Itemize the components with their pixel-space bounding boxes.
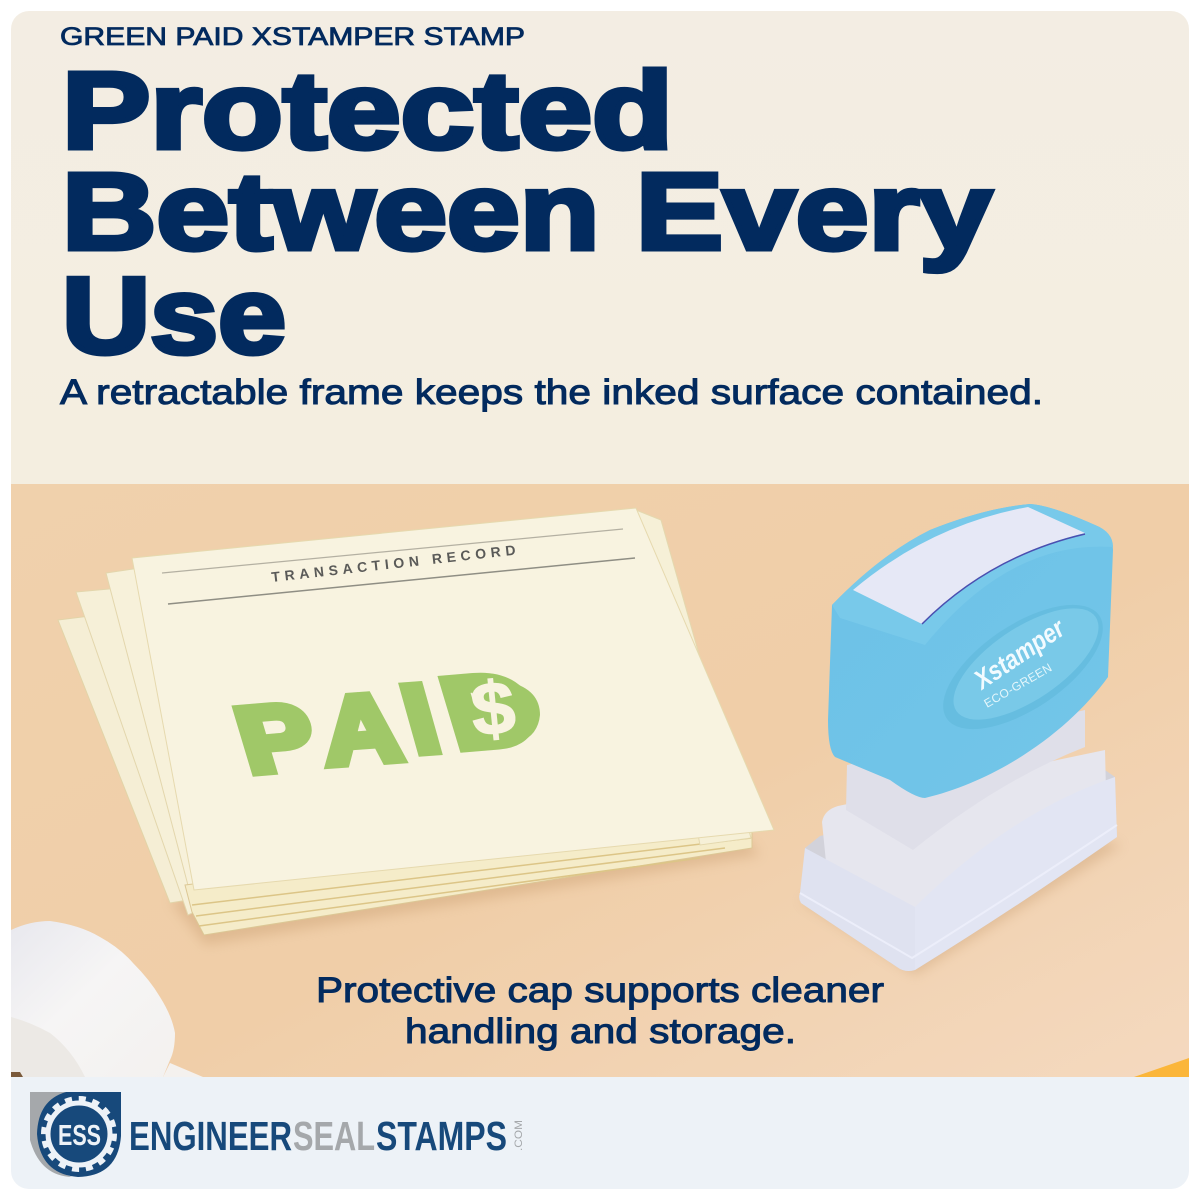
stamped impression: PAID: D <box>429 652 551 771</box>
top sheet <box>132 508 774 890</box>
illustration: blue Xstamper stamp <box>799 504 1123 975</box>
sheet bottom layers <box>184 832 752 935</box>
cap top rim <box>832 504 1113 645</box>
title <box>62 50 992 377</box>
title: Between Every <box>62 151 992 273</box>
caption: handling and storage. <box>405 1012 796 1051</box>
caption: Protective cap supports cleaner <box>316 971 884 1010</box>
panel: footer band <box>11 1077 1189 1189</box>
title: Protected <box>62 50 673 172</box>
gear emblem <box>48 1103 110 1165</box>
tray left wall <box>799 848 915 971</box>
ESS initials: ESS <box>58 1120 101 1152</box>
logo: Engineer Seal Stamps <box>30 1092 525 1177</box>
.com: .COM <box>513 1120 525 1151</box>
icon: paper tape roll <box>11 921 203 1077</box>
stamped impression: PAID: I <box>391 664 450 774</box>
stamped impression: PAID: P <box>224 683 328 793</box>
plunger block <box>822 750 1106 908</box>
neck <box>846 710 1085 804</box>
logo shield <box>30 1092 72 1177</box>
wordmark: SEAL <box>293 1113 375 1159</box>
tray silhouette and cavity <box>799 770 1117 971</box>
wordmark: STAMPS <box>376 1113 507 1159</box>
illustration: stack of transaction record sheets <box>58 508 774 945</box>
dollar sign in stamp: $ <box>467 666 519 753</box>
Xstamper logo text: Xstamper <box>967 612 1071 696</box>
sheet 4 <box>58 616 182 904</box>
sheet 3 <box>76 588 192 916</box>
white label window <box>853 507 1085 624</box>
sheet 2 right edge <box>636 510 751 845</box>
subheading: A retractable frame keeps the inked surface contained. <box>60 373 1043 412</box>
Eco-Green text: ECO-GREEN <box>982 660 1054 711</box>
eyebrow: GREEN PAID XSTAMPER STAMP <box>60 23 525 51</box>
tray right wall <box>915 777 1117 970</box>
blue cap <box>828 504 1113 798</box>
stamp D solid fill <box>472 685 540 738</box>
wordmark: ENGINEER <box>129 1113 292 1159</box>
panel: wooden table <box>11 484 1189 1078</box>
label: transaction record: TRANSACTION RECORD <box>271 541 519 585</box>
icon: yellow object corner <box>1134 1058 1189 1077</box>
caption <box>316 971 884 1051</box>
panel: cream wall background <box>11 11 1189 485</box>
oval logo window <box>944 605 1102 729</box>
title: Use <box>62 255 286 377</box>
sheet 2 left edge <box>106 568 188 884</box>
stamped impression: PAID: A <box>317 672 407 786</box>
stamped impression: PAID <box>232 672 528 777</box>
